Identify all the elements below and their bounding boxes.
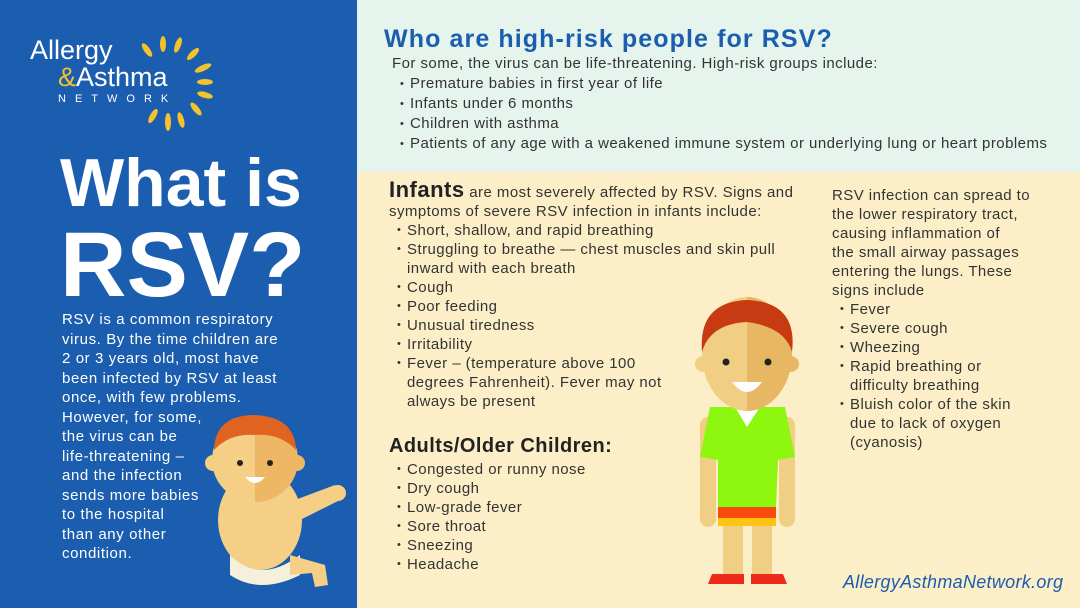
title: What is RSV?: What is — [60, 145, 302, 221]
text block: infants: Unusual tiredness — [407, 317, 535, 334]
footer: website: AllergyAsthmaNetwork.org — [843, 572, 1063, 592]
text block: lower respiratory: Bluish color of the skin — [850, 396, 1011, 413]
text block: adults: Adults/Older Children: — [389, 435, 612, 457]
list: high-risk groups: Patients of any age with a weakened immune system or underlying lung or heart problems — [410, 135, 1047, 152]
text block: lower respiratory: Rapid breathing or — [850, 358, 982, 375]
text block: infants: Cough — [407, 279, 453, 296]
text block: lower respiratory: RSV infection can spread to — [832, 187, 1030, 204]
text block: infants: Infants are most severely affected by RSV. Signs and — [389, 177, 793, 202]
text block: RSV description: to the hospital — [62, 506, 164, 523]
panel: left blue — [0, 0, 357, 608]
icon: baby — [205, 415, 346, 587]
text block: RSV description: and the infection — [62, 467, 182, 484]
text block: RSV description: once, with few problems. — [62, 389, 241, 406]
text block: adults: Low-grade fever — [407, 499, 522, 516]
text block: infants: Irritability — [407, 336, 472, 353]
title: What is RSV?: RSV? — [60, 214, 305, 316]
text block: lower respiratory: the small airway passages — [832, 244, 1019, 261]
text block: RSV description: However, for some, — [62, 408, 202, 426]
text block: infants: Struggling to breathe — chest muscles and skin pull — [407, 241, 775, 258]
text block: adults: Sneezing — [407, 537, 473, 554]
logo: &Asthma — [58, 62, 168, 92]
text block: RSV description: sends more babies — [62, 486, 199, 504]
text block: RSV description: life-threatening – — [62, 448, 185, 464]
text block: lower respiratory: Wheezing — [850, 339, 920, 356]
text block: lower respiratory: the lower respiratory tract, — [832, 206, 1018, 223]
text block: RSV description: been infected by RSV at least — [62, 370, 277, 386]
panel: high-risk (mint) — [357, 0, 1080, 172]
text block: lower respiratory: causing inflammation of — [832, 225, 1000, 242]
text block: infants: Fever – (temperature above 100 — [407, 355, 636, 372]
text block: lower respiratory: due to lack of oxygen — [850, 415, 1001, 432]
text block: infants: symptoms of severe RSV infection in infants include: — [389, 203, 762, 220]
text block: lower respiratory — [832, 187, 1030, 451]
text block: RSV description: RSV is a common respiratory — [62, 311, 273, 328]
logo: NETWORK — [58, 93, 177, 105]
text block: infants: inward with each breath — [407, 260, 576, 277]
text block: RSV description — [62, 311, 278, 562]
list: high-risk groups — [392, 55, 1047, 152]
text block: infants: always be present — [407, 393, 536, 410]
list: high-risk groups: Infants under 6 months — [410, 95, 573, 112]
text block: lower respiratory: signs include — [832, 282, 925, 299]
text block: lower respiratory: (cyanosis) — [850, 434, 923, 451]
text block: lower respiratory: Severe cough — [850, 320, 948, 337]
text block: adults — [389, 435, 612, 573]
text block: lower respiratory: difficulty breathing — [850, 377, 980, 394]
text block: infants: Poor feeding — [407, 298, 497, 315]
list: high-risk groups: For some, the virus can be life-threatening. High-risk groups include: — [392, 55, 878, 72]
list: high-risk groups: Premature babies in first year of life — [410, 75, 663, 92]
icon: sun rays — [142, 36, 213, 131]
logo — [30, 35, 213, 131]
logo: Allergy — [30, 35, 113, 65]
text block: adults: Congested or runny nose — [407, 461, 586, 478]
text block: lower respiratory: Fever — [850, 301, 891, 318]
text block: adults: Sore throat — [407, 518, 486, 535]
text block: infants: Short, shallow, and rapid breathing — [407, 222, 654, 239]
text block: RSV description: 2 or 3 years old, most have — [62, 350, 259, 367]
icon: boy — [695, 297, 799, 584]
text block: adults: Dry cough — [407, 480, 479, 497]
text block: RSV description: than any other — [62, 526, 166, 542]
text block: RSV description: virus. By the time children are — [62, 330, 278, 348]
text block: infants — [389, 177, 793, 410]
text block: RSV description: condition. — [62, 545, 132, 562]
list: high-risk groups: Children with asthma — [410, 115, 559, 132]
title: What is RSV? — [60, 145, 305, 316]
text block: infants: degrees Fahrenheit). Fever may not — [407, 374, 662, 391]
heading: high-risk: Who are high-risk people for RSV? — [384, 25, 833, 53]
text block: adults: Headache — [407, 556, 479, 573]
text block: lower respiratory: entering the lungs. These — [832, 263, 1012, 280]
text block: RSV description: the virus can be — [62, 428, 178, 445]
